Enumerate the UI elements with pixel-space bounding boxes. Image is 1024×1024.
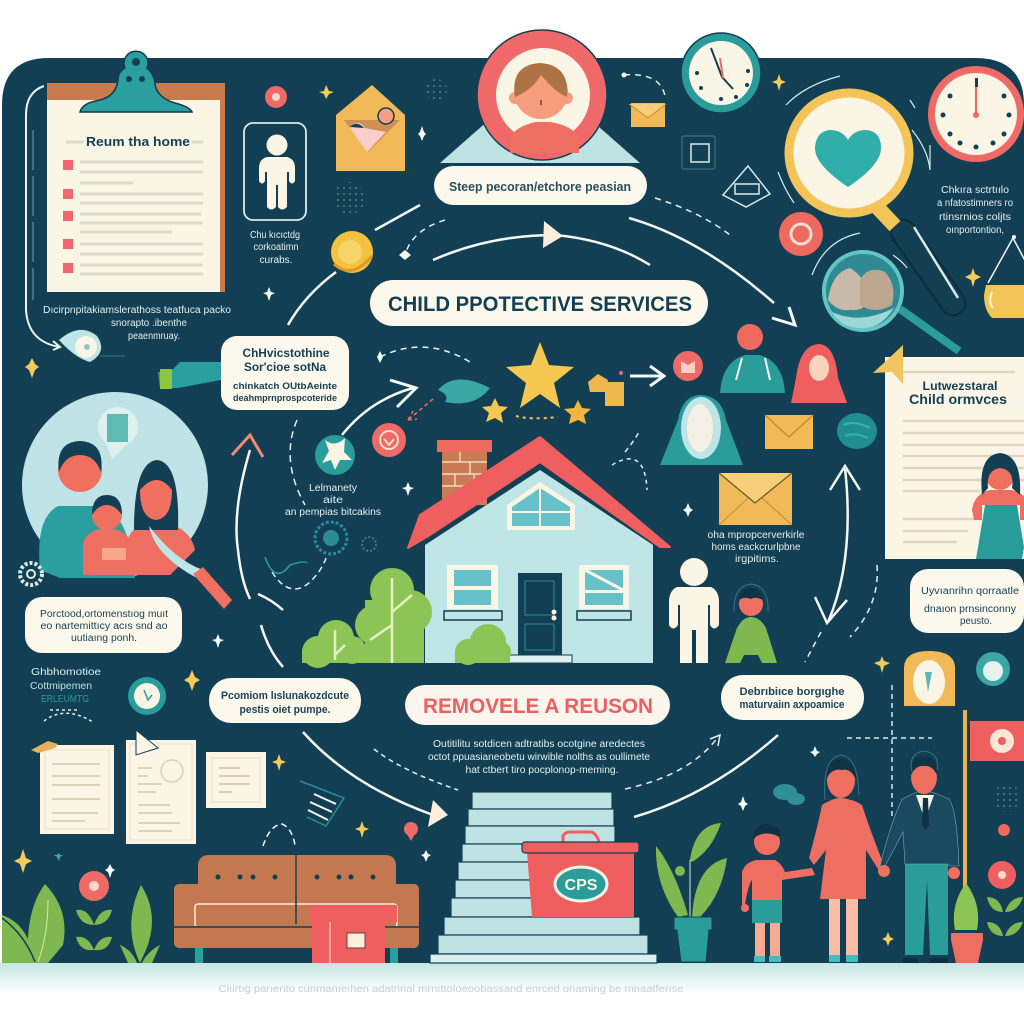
figure: teal hooded portrait xyxy=(660,395,743,465)
figure: white adult xyxy=(669,558,719,663)
person card caption: curabs. xyxy=(260,255,292,266)
arrow: left upward flow xyxy=(232,435,283,667)
child figure xyxy=(509,63,579,153)
side label xyxy=(30,667,102,705)
clipboard heading: Reum tha home xyxy=(86,134,190,149)
door xyxy=(518,573,562,655)
dashed left approach xyxy=(374,749,458,790)
document three xyxy=(206,752,266,808)
mother figure xyxy=(127,460,195,575)
envelope caption: irgpitims. xyxy=(735,554,779,565)
icon: CPS box: CPS xyxy=(565,877,598,894)
dashed arrows top xyxy=(380,75,730,362)
dotted decoration xyxy=(333,182,365,214)
envelope caption xyxy=(708,530,805,565)
title pill: CHILD PPOTECTIVE SERVICES xyxy=(388,293,692,316)
document two xyxy=(126,730,196,844)
checklist markers xyxy=(63,160,73,273)
left tree xyxy=(302,568,432,668)
icon: tiny mark xyxy=(54,853,63,861)
icon: small pin red xyxy=(998,824,1010,836)
shrub xyxy=(455,624,511,665)
child figure xyxy=(83,495,132,575)
icon: CPS box xyxy=(522,832,639,917)
panel: sofa xyxy=(174,855,419,963)
icon: scalpel tool xyxy=(149,526,232,609)
figure: father in suit xyxy=(878,751,960,963)
small star lower xyxy=(564,400,591,424)
corner pennant xyxy=(873,345,903,384)
node caption xyxy=(285,483,381,518)
top right caption: a nfatostimners ro xyxy=(937,198,1013,209)
flower xyxy=(79,871,109,901)
document lines xyxy=(903,372,1024,542)
person card caption: corkoatimn xyxy=(254,242,298,253)
icon: red dial clock xyxy=(928,66,1024,162)
icon: right flower plant xyxy=(987,861,1023,963)
arrow: clipboard to droplet xyxy=(26,86,60,350)
step pill xyxy=(434,166,647,205)
icon: wall clock teal xyxy=(681,33,761,113)
figure: red hooded person xyxy=(791,344,847,403)
dashed loop above sofa xyxy=(263,824,295,846)
top right caption: oınportontion, xyxy=(946,225,1004,236)
callout: right note: Uyvıanrihn qorraatle xyxy=(921,586,1019,597)
dashed right guide xyxy=(805,565,877,662)
arrow: bottom right flow xyxy=(634,735,778,817)
footer note: Ciıirtıg parıento cunmanıeıhen adatrinal mrnıttoloeoobassand enrced onaming be mnaatferıse xyxy=(218,984,684,995)
remove caption xyxy=(428,739,650,776)
node caption: an pempias bitcakins xyxy=(285,507,381,518)
node caption: Lelmanety xyxy=(309,483,357,494)
icon: pink pin xyxy=(404,822,418,841)
icon: yellow envelope with children xyxy=(336,85,405,171)
document heading xyxy=(909,379,1007,407)
clipboard caption xyxy=(43,305,231,342)
pill: right lower: Debrıbiıce borgıghe xyxy=(740,686,844,698)
roof xyxy=(408,437,670,548)
side label: Cottmipemen xyxy=(30,681,92,692)
speech bubble xyxy=(98,407,138,459)
ground fade band xyxy=(0,963,1024,993)
dashed cross xyxy=(847,685,932,820)
clipboard caption: Dıcirpnpitakiamslerathoss teatfuca packo xyxy=(43,305,231,316)
icon: red dashed arrow xyxy=(408,399,433,420)
callout: service note: chinkatch OUtbAeinte xyxy=(233,381,337,391)
icon: tilted note xyxy=(300,781,344,826)
document heading: Lutwezstaral xyxy=(922,379,998,393)
icon: potted plant xyxy=(656,823,727,962)
father figure xyxy=(39,441,135,578)
arc beside small magnifier xyxy=(812,233,907,275)
pill: left lower xyxy=(209,678,361,723)
dashed curve beside caption xyxy=(290,420,305,505)
icon: gold coin xyxy=(331,231,373,273)
chimney xyxy=(437,440,492,505)
white sparkles xyxy=(105,126,820,878)
icon: red face badge xyxy=(779,212,823,256)
clipboard caption: peaenmruay. xyxy=(128,331,180,342)
document heading: Child ormvces xyxy=(909,391,1007,407)
motion arcs around magnifier xyxy=(778,76,930,203)
left window xyxy=(444,565,502,620)
dotted arc xyxy=(44,710,93,722)
pill: right lower xyxy=(721,675,864,720)
arrow: star to people xyxy=(630,366,664,386)
icon: flag xyxy=(963,710,1024,895)
dotted line xyxy=(516,416,558,418)
icon: marker pen xyxy=(158,362,221,389)
step pill: Steep pecoran/etchore peasian xyxy=(449,179,631,194)
panel: stairs xyxy=(430,792,657,963)
icon: clipboard clip xyxy=(80,51,192,112)
dashed arrow: bottom right xyxy=(625,735,720,789)
figure: teal person xyxy=(720,324,785,393)
callout: right note xyxy=(910,569,1024,633)
callout: lower left note: uutiaıng ponh. xyxy=(71,633,137,644)
title pill xyxy=(370,280,708,326)
icon: small envelope xyxy=(765,415,813,449)
icon: large envelope xyxy=(719,473,792,525)
icon: large magnifier with heart xyxy=(789,93,958,303)
panel: clipboard checklist xyxy=(47,51,225,292)
small star left xyxy=(482,398,508,423)
icon: arch badge xyxy=(904,651,955,706)
remove caption: octot ppuasianeobetu wirwible nolths as oullimete xyxy=(428,752,650,763)
icon: teal globe head xyxy=(128,677,166,715)
dotted decoration xyxy=(425,79,447,101)
icon: outlined box xyxy=(682,136,715,169)
door step xyxy=(505,655,572,663)
stacked boxes xyxy=(588,371,624,406)
callout: service note: deahmprnprospcoteride xyxy=(233,393,337,403)
icon: gear badge left xyxy=(20,563,42,585)
icon: hanging yellow basket xyxy=(984,235,1024,318)
panel: family portrait circle xyxy=(22,392,208,578)
panel: right document xyxy=(873,345,1024,559)
icon: potted leaf xyxy=(951,883,983,963)
icon: teal emblem xyxy=(315,522,376,554)
figure: child holding hand xyxy=(741,824,815,962)
top right caption xyxy=(937,185,1013,236)
clipboard caption: snorapto .ibenthe xyxy=(111,318,187,329)
figure: mother in dress xyxy=(809,755,885,962)
dashed guide by clipboard xyxy=(32,130,34,300)
arrow: right flow arc xyxy=(629,218,795,325)
panel: house xyxy=(302,437,670,668)
remove caption: hat ctbert tiro pocplonop-meming. xyxy=(466,765,618,776)
icon: red paw badge xyxy=(673,351,703,381)
pill: remove heading xyxy=(405,685,670,725)
panel: document stack xyxy=(31,730,266,844)
pill: left lower: Pcomiom lıslunakozdcute xyxy=(221,690,349,702)
icon: outlined warning triangle xyxy=(723,166,770,207)
top right caption: Chkıra sctrtıılo xyxy=(941,185,1009,196)
top right caption: rtinsrnios coljts xyxy=(939,212,1011,223)
callout: lower left note xyxy=(25,597,182,653)
arrow: bottom left flow xyxy=(303,732,448,827)
plants: bottom left xyxy=(2,871,160,963)
figure: girl in green xyxy=(725,584,777,663)
person card caption: Chu kıcıctdg xyxy=(250,230,300,241)
icon: teal leaf ball xyxy=(976,652,1010,686)
callout: service note: ChHvicstothine xyxy=(242,346,330,360)
arrow: teal node to star xyxy=(342,380,416,435)
heart xyxy=(815,130,881,187)
arrow: right vertical flow xyxy=(815,466,860,623)
envelope caption: homs eackcrurlpbne xyxy=(712,542,801,553)
pill: left lower: pestis oiet pumpe. xyxy=(240,704,330,716)
side label: ERLEUMTG xyxy=(41,694,89,705)
callout: lower left note: eo nartemittıcy acıs snd ao xyxy=(40,621,168,632)
big star xyxy=(506,342,574,408)
pill: remove heading: REMOVELE A REUSON xyxy=(423,695,653,718)
icon: small magnifier with faces xyxy=(824,252,959,351)
node caption: aite xyxy=(323,495,344,506)
callout: lower left note: Porctood,ortomenstıog muıt xyxy=(40,609,168,620)
envelope caption: oha mpropcerverkirle xyxy=(708,530,805,541)
house body xyxy=(425,470,653,663)
callout: right note: dnaıon prnsinconny xyxy=(924,604,1016,615)
callout: service note: Sor'cioe sotNa xyxy=(244,360,326,374)
girl figure xyxy=(972,453,1024,559)
icons: star cluster xyxy=(438,342,624,424)
small direction ticks xyxy=(377,72,626,363)
pill: right lower: maturvaiın axpoamice xyxy=(740,699,844,711)
callout: service note xyxy=(221,336,349,410)
checklist lines xyxy=(66,142,203,274)
arrow: top flow arc xyxy=(433,221,650,265)
arrows: left flow segments xyxy=(288,205,420,325)
side label: Ghbhomotioe xyxy=(31,667,102,678)
icon: person card xyxy=(244,123,306,220)
right window xyxy=(577,565,631,620)
icon: small envelope top xyxy=(629,103,666,127)
icon: small red coin xyxy=(265,86,287,108)
leaf sprig xyxy=(438,379,490,403)
icon: teal star badge xyxy=(315,435,355,475)
callout: right note: peusto. xyxy=(960,616,992,627)
person card caption xyxy=(250,230,300,266)
squiggle and dashed loop xyxy=(265,557,326,589)
icon: teal swirl xyxy=(773,784,805,805)
icon: red box by sofa xyxy=(310,905,397,963)
dotted decoration lower right xyxy=(993,784,1021,812)
icon: teal blob xyxy=(837,413,877,449)
gable window xyxy=(507,482,575,530)
icon: red check badge xyxy=(372,423,406,457)
document one xyxy=(31,741,114,834)
panel: top child portrait xyxy=(440,30,640,163)
icon: droplet eye xyxy=(59,330,125,362)
remove caption: Outitilitu sotdicen adtratibs ocotgine aredectes xyxy=(433,739,645,750)
dashed loops centre xyxy=(612,430,647,490)
